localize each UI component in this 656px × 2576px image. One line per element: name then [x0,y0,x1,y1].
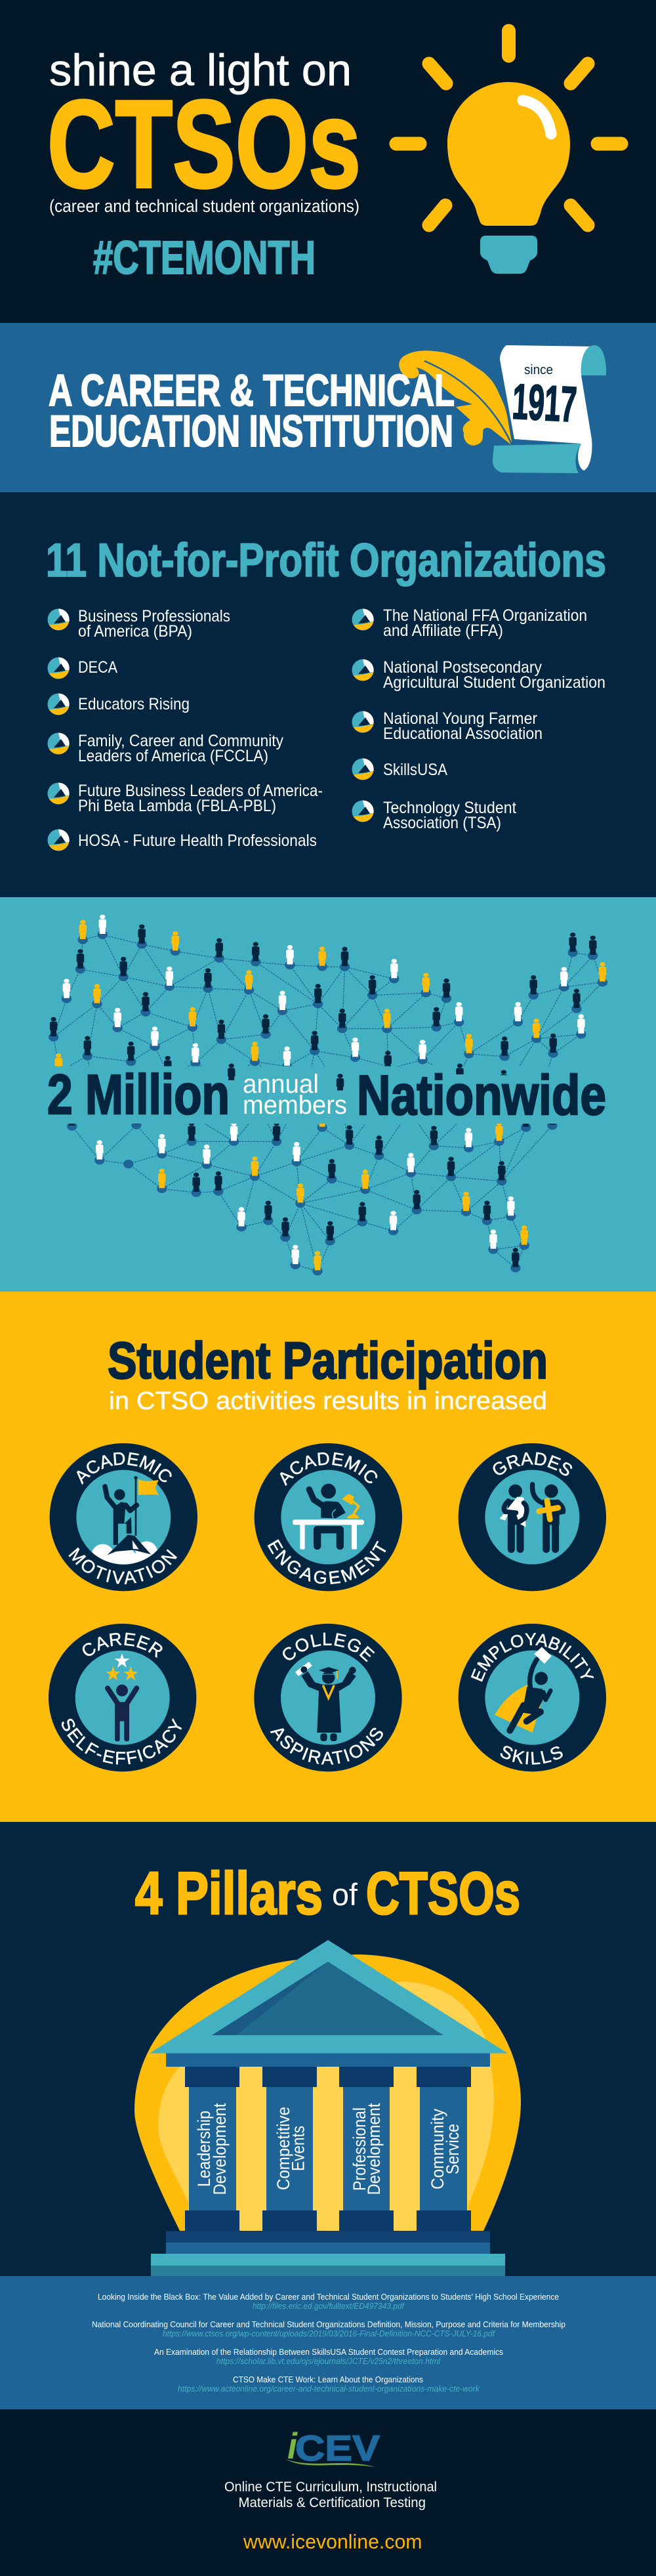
reference 1: Looking Inside the Black Box: The Value Added by Career and Technical Student Organizations to Students’ High School Experience [98,2292,559,2302]
stat label: annual members: members [243,1091,347,1120]
reference 2: National Coordinating Council for Career and Technical Student Organizations Definition, Mission, Purpose and Criteria for Membership [92,2320,565,2329]
pillar: community service [428,2109,462,2189]
badge: career self-efficacy [49,1624,197,1772]
label: motivation: MOTIVATION [68,1548,177,1584]
stat label: annual members: annual [243,1070,319,1099]
hashtag: #CTEMONTH [93,232,316,284]
reference 2 [92,2320,565,2338]
title: CTSOs: CTSOs [47,75,361,214]
heading line 1: A CAREER & TECHNICAL [49,366,455,415]
pillar: leadership development [194,2103,230,2195]
heading: CTSOs: CTSOs [366,1861,520,1927]
list: left column: Future Business Leaders of America- [78,782,323,800]
label: since: since [524,363,553,377]
reference 3 [154,2348,503,2366]
reference 3: https://scholar.lib.vt.edu/ojs/ejournals/JCTE/v25n2/threeton.html [216,2357,441,2366]
tagline: Online CTE Curriculum, Instructional [224,2480,437,2495]
badge: academic motivation [50,1443,197,1591]
list: right column: and Affiliate (FFA) [383,622,503,640]
list: left column: Business Professionals [78,607,230,625]
map: network of people [0,915,656,1275]
reference 1: http://files.eric.ed.gov/fulltext/ED497343.pdf [253,2302,405,2311]
list: right column: Association (TSA) [383,814,501,832]
tagline [224,2480,437,2510]
list: right column: Technology Student [383,799,516,817]
list: left column: DECA [78,658,117,677]
label: 1917: 1917 [511,373,578,433]
label: skills: SKILLS [500,1746,563,1765]
heading: of: of [332,1877,358,1912]
scroll: since 1917 [493,345,606,473]
panel: student participation [0,1292,656,1822]
heading line 2: EDUCATION INSTITUTION [49,406,453,456]
panel: footer [0,2409,656,2576]
reference 3: An Examination of the Relationship Between SkillsUSA Student Contest Preparation and Academics [154,2348,503,2357]
label: academic: ACADEMIC [77,1452,172,1485]
label: career: CAREER [83,1633,163,1658]
pillar: leadership development: Development [210,2103,230,2195]
illustration: temple over bulb [134,1940,521,2276]
label: academic: ACADEMIC [279,1452,378,1486]
logo: iCEV: CEV [295,2428,380,2468]
label: employability: EMPLOYABILITY [471,1633,594,1681]
list: left column: Leaders of America (FCCLA) [78,747,268,765]
pillar: competitive events: Competitive [274,2107,293,2190]
label: self-efficacy: SELF-EFFICACY [62,1718,182,1764]
heading: Student Participation [108,1331,548,1389]
list: left column [47,607,323,851]
pillar: professional development [350,2103,384,2195]
pillar: competitive events [274,2107,308,2190]
pillar: professional development: Professional [350,2107,369,2191]
list: right column: National Young Farmer [383,709,537,728]
list: right column: Educational Association [383,725,543,743]
icon: document in hand [534,1647,552,1664]
label: engagement: ENGAGEMENT [268,1539,386,1584]
badge: academic engagement [255,1443,402,1591]
panel: 4 pillars [0,1822,656,2276]
reference 4: https://www.acteonline.org/career-and-technical-student-organizations-make-cte-work [178,2384,480,2394]
stat: Nationwide: Nationwide [357,1065,606,1127]
pillar: community service: Service [443,2124,462,2174]
subtitle: (career and technical student organizations) [49,196,359,216]
panel: hero [0,0,656,323]
title line: shine a light on: shine a light on [49,45,352,95]
panel: 11 organizations [0,492,656,897]
panel: references [0,2276,656,2409]
reference 1 [98,2292,559,2311]
stat: 2 Million: 2 Million [47,1064,230,1126]
pillar: competitive events: Events [289,2126,308,2171]
label: grades: GRADES [493,1452,572,1476]
badge: employability skills [458,1624,606,1772]
website: www.icevonline.com [243,2530,422,2553]
list: right column [352,606,605,832]
reference 2: https://www.ctsos.org/wp-content/uploads/2019/03/2016-Final-Definition-NCC-CTS-JULY-16.pdf [163,2329,495,2338]
subheading: in CTSO activities results in increased [109,1387,547,1415]
list: right column: SkillsUSA [383,761,447,779]
list: left column: HOSA - Future Health Professionals [78,832,317,850]
list: left column: of America (BPA) [78,622,192,641]
list: left column: Phi Beta Lambda (FBLA-PBL) [78,797,276,815]
list: left column: Educators Rising [78,695,190,713]
pillar: community service: Community [428,2109,447,2189]
pillar: leadership development: Leadership [194,2111,214,2187]
icon: light bulb [396,31,621,274]
logo: iCEV: i [287,2425,298,2466]
badge: grades [458,1443,606,1591]
list: right column: Agricultural Student Organization [383,673,605,692]
list: right column: National Postsecondary [383,658,542,677]
panel: 2 million members map [0,897,656,1292]
panel: career and technical institution [0,323,656,492]
heading: 4 Pillars: 4 Pillars [135,1861,323,1927]
reference 4: CTSO Make CTE Work: Learn About the Organizations [233,2375,423,2384]
stat label: annual members [243,1070,347,1120]
list: right column: The National FFA Organization [383,606,587,625]
pillar: professional development: Development [364,2103,384,2195]
reference 4 [178,2375,480,2394]
label: aspirations: ASPIRATIONS [270,1727,383,1765]
label: college: COLLEGE [283,1633,375,1662]
list: left column: Family, Career and Community [78,732,283,750]
tagline: Materials & Certification Testing [239,2495,426,2510]
badge: college aspirations [254,1624,402,1772]
icon: feather quill [399,350,512,446]
